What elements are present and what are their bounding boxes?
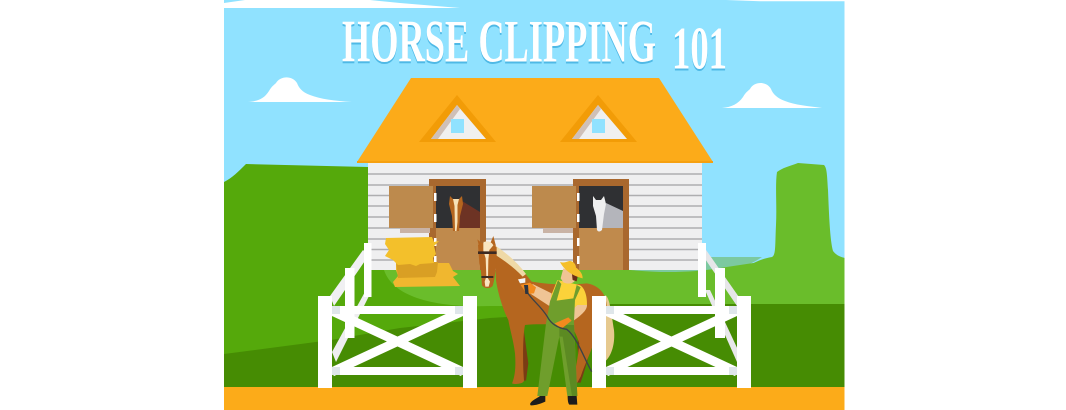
right stable door [532,179,629,270]
title text: HORSE CLIPPING [342,8,656,74]
shoes [530,396,545,405]
far arm [564,305,587,323]
orange ground [224,387,845,410]
body and neck [495,248,607,384]
title text [342,8,727,82]
hat [560,261,583,278]
horse [477,236,614,384]
gate rails [340,306,455,314]
overalls shading [559,325,577,396]
roof [357,78,713,162]
gate rails [614,306,729,314]
gate cross braces [606,311,737,372]
rail shadows [332,306,463,375]
left fence front post [345,268,354,338]
mane [483,242,526,277]
ears [478,236,496,246]
right gate [592,296,751,388]
gate posts [318,296,332,388]
tail [605,295,614,361]
overalls [537,280,581,396]
siding lines [368,174,702,260]
right side fence [698,243,741,362]
left stable door [389,179,486,270]
near arm [530,284,552,306]
hair [572,272,578,281]
gate cross braces [332,311,463,372]
distant pond [630,257,762,272]
farm scene illustration [224,0,844,410]
title shadow: 101 [672,18,727,84]
halter [478,251,497,278]
title [342,8,727,84]
rail shadows [606,306,737,375]
far legs [577,340,588,383]
clouds [224,0,845,108]
barn [357,78,713,270]
shirt [550,280,587,313]
scene contents [224,0,845,410]
barn wall [368,163,702,270]
clipper cable [527,292,592,372]
hay bales [385,237,460,287]
left gate [318,296,477,388]
blaze [483,241,493,287]
dark green foreground [224,304,845,390]
left dormer [419,95,496,142]
right dormer [560,95,637,142]
roof eave [357,161,713,163]
meadow [384,262,760,306]
left side fence [330,243,372,362]
right fence front post [715,268,725,338]
groom [518,261,592,405]
gloves [521,283,536,294]
head [478,243,497,288]
clippers [518,278,525,283]
gate posts [592,296,606,388]
sky [224,0,844,264]
title shadow [342,10,727,84]
left hill [224,164,507,354]
title shadow: HORSE CLIPPING [342,10,656,76]
clipper handle [524,285,529,294]
right mesa hill [754,163,844,304]
head [561,268,577,284]
title text: 101 [672,16,727,82]
